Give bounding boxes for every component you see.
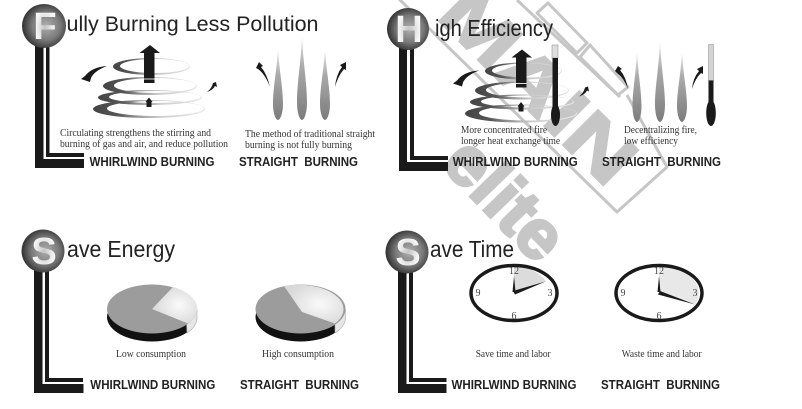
label whirlwind: WHIRLWIND BURNING [453, 155, 578, 169]
thermometer low [706, 44, 716, 126]
straight flames [256, 37, 346, 120]
caption high: High consumption [262, 349, 335, 360]
panel: save time [386, 230, 720, 393]
badge H [387, 8, 429, 51]
whirlwind flame [81, 45, 217, 118]
label straight: STRAIGHT BURNING [601, 378, 720, 392]
clock: save time [471, 265, 557, 322]
watermark [398, 0, 667, 276]
panel: save energy [22, 230, 359, 393]
caption straight: The method of traditional straight [245, 129, 375, 140]
label whirlwind: WHIRLWIND BURNING [90, 378, 215, 392]
badge S: S [31, 231, 57, 273]
title: igh Efficiency [435, 15, 553, 41]
label whirlwind: WHIRLWIND BURNING [452, 378, 576, 392]
pie: high consumption [256, 284, 346, 342]
bracket [35, 46, 84, 168]
clock: save time: 6 [512, 311, 516, 322]
panel: fully burning less pollution [22, 4, 375, 169]
clock: waste time: 3 [692, 288, 698, 299]
label straight: STRAIGHT BURNING [602, 155, 721, 169]
caption whirlwind: burning of gas and air, and reduce pollution [60, 139, 229, 150]
title: ave Energy [67, 236, 175, 262]
clock: save time: 12 [509, 266, 519, 277]
caption whirlwind: longer heat exchange time [461, 136, 560, 147]
clock: save time: 3 [548, 288, 552, 299]
clock: waste time: 9 [620, 288, 626, 299]
label whirlwind: WHIRLWIND BURNING [90, 155, 214, 169]
caption whirlwind: More concentrated fire [461, 125, 547, 136]
caption save: Save time and labor [476, 349, 551, 360]
clock: waste time: 6 [656, 311, 662, 322]
bracket [398, 270, 446, 393]
bracket [399, 46, 448, 171]
badge F: F [33, 6, 57, 48]
label straight: STRAIGHT BURNING [240, 378, 359, 392]
caption whirlwind: Circulating strengthens the stirring and [60, 128, 212, 139]
panel: high efficiency [387, 8, 721, 171]
clock: waste time [616, 265, 702, 322]
badge S [22, 230, 64, 273]
clock: waste time: 12 [654, 266, 664, 277]
title: ully Burning Less Pollution [66, 12, 318, 36]
title: ave Time [430, 236, 514, 262]
thermometer high [551, 45, 560, 126]
badge H: H [395, 9, 423, 51]
straight flames [615, 42, 703, 122]
badge F [22, 4, 66, 48]
whirlwind flame [453, 50, 589, 122]
watermark: elite [429, 121, 583, 276]
label straight: STRAIGHT BURNING [239, 155, 358, 169]
caption straight: Decentralizing fire, [624, 125, 697, 136]
bracket [34, 270, 84, 393]
badge S [386, 230, 428, 274]
caption straight: burning is not fully burning [245, 140, 353, 151]
pie: low consumption [107, 284, 197, 342]
caption waste: Waste time and labor [622, 349, 702, 360]
caption straight: low efficiency [624, 136, 679, 147]
caption low: Low consumption [116, 349, 187, 360]
badge S: S [395, 232, 421, 274]
clock: save time: 9 [476, 288, 480, 299]
